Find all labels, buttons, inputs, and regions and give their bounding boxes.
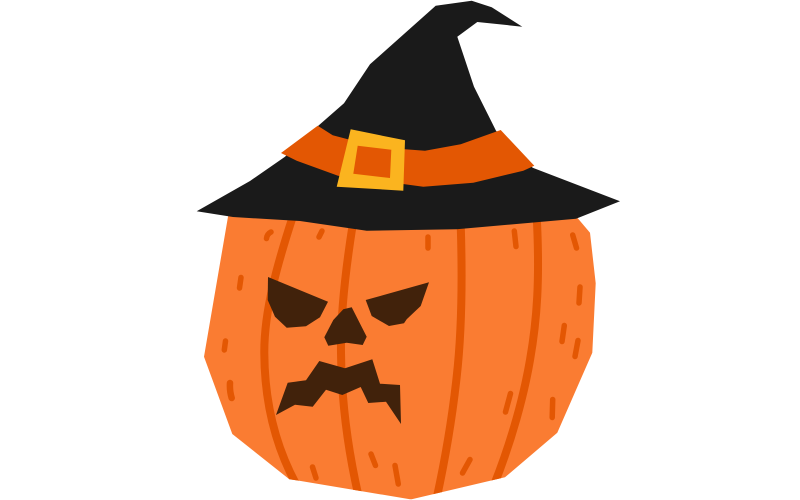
hat shape: [197, 1, 620, 231]
mouth: [276, 359, 401, 424]
buckle: [337, 129, 405, 191]
hat band: [281, 126, 534, 187]
nose: [324, 307, 367, 346]
right eye: [366, 282, 429, 326]
illustration: jack-o'-lantern wearing a witch hat: [196, 0, 620, 500]
left eye: [268, 277, 328, 328]
witch hat: [197, 1, 620, 231]
pumpkin skin marks: [224, 231, 580, 484]
pumpkin: [204, 215, 596, 499]
pumpkin body: [204, 215, 596, 499]
pumpkin ribs: [264, 216, 538, 499]
